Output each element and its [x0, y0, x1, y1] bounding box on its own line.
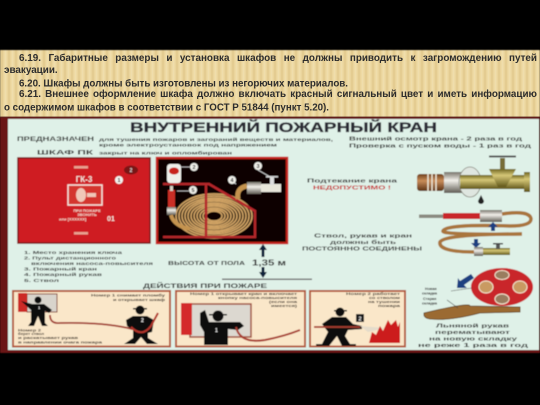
regulation text block [4, 53, 537, 114]
purpose text: ПРЕДНАЗНАЧЕН [17, 137, 94, 143]
purpose text [17, 136, 334, 156]
closed cabinet [18, 158, 150, 243]
parts list: включения насоса-повысителя [31, 262, 153, 267]
linen hose note: на новую складку [429, 336, 519, 342]
linen hose note: не реже 1 раза в год [418, 343, 529, 349]
action panel 1 [13, 291, 170, 346]
leak warning: Подтекание крана [307, 178, 399, 184]
hose reel illustration: складка [422, 292, 438, 296]
purpose text: закрыт на ключ и опломбирован [99, 150, 232, 156]
action panel 1: берет ствол [18, 332, 45, 336]
linen hose note: Льняной рукав [436, 322, 510, 330]
closed cabinet: ГК-3 [76, 175, 93, 184]
action panel 2: кнопку насоса-повысителя [218, 296, 297, 300]
connected parts note [302, 234, 422, 252]
purpose text: ШКАФ ПК [37, 150, 94, 156]
action panel 1: Номер 1 снимает пломбу [91, 294, 165, 298]
parchment band [0, 50, 540, 117]
purpose text: кроме электроустановок под напряжением [99, 144, 278, 148]
action panel 1: и раскатывает рукав [18, 336, 79, 340]
closed cabinet: 2 [130, 168, 133, 174]
height from floor: ВЫСОТА ОТ ПОЛА [168, 261, 246, 267]
action panel 1: 2 [141, 318, 144, 324]
poster frame [0, 117, 540, 353]
connected hose illustration [419, 210, 531, 256]
poster background [8, 119, 539, 350]
parts list: 5. Ствол [24, 278, 59, 284]
height from floor [168, 244, 312, 280]
regulation text block: 6.21. Внешнее оформление шкафа должно включать красный сигнальный цвет и иметь информацию [19, 89, 537, 100]
action panel 1: Номер 2 [18, 328, 41, 332]
action panel 1: 1 [38, 305, 41, 310]
open cabinet with hose: 4 [230, 178, 234, 184]
closed cabinet: или [ХХХХХХ] [59, 216, 87, 222]
action panel 3: Номер 2 работает [346, 292, 400, 296]
action panel 3: пожара [378, 304, 402, 308]
open cabinet with hose: 5 [191, 188, 195, 194]
hose reel illustration: Новая [425, 287, 437, 291]
closed cabinet: 01 [107, 216, 115, 223]
leak warning: НЕДОПУСТИМО ! [313, 186, 391, 192]
regulation text block: 6.19. Габаритные размеры и установка шкафов не должны приводить к загромождению путей [19, 53, 537, 64]
action panel 3: со стволом [369, 296, 401, 300]
fire valve illustration [417, 156, 530, 204]
closed cabinet: ПРИ ПОЖАРЕ [73, 208, 101, 213]
regulation text block: о содержимом шкафов в соответствии с ГОСТ Р 51844 (пункт 5.20). [4, 102, 329, 114]
action panel 2: 1 [215, 328, 218, 334]
hose reel illustration: Старая [423, 297, 436, 301]
poster [0, 117, 540, 353]
height from floor: 1,35 м [252, 258, 286, 268]
hose reel illustration: складка [422, 302, 438, 306]
parts list [24, 250, 153, 284]
hose reel illustration [422, 268, 533, 319]
action panel 3: 2 [358, 316, 362, 322]
parts list: 2. Пульт дистанционного [24, 256, 116, 262]
regulation text block: 6.20. Шкафы должны быть изготовлены из негорючих материалов. [19, 78, 348, 90]
linen hose note [418, 322, 529, 349]
purpose text: для тушения пожаров и загораний веществ и материалов, [99, 136, 334, 143]
action panel 2: имеется) [271, 304, 298, 308]
closed cabinet: ЗВОНИТЬ [77, 212, 97, 217]
regulation text block: эвакуации. [4, 65, 58, 76]
action panel 1: и открывает шкаф [113, 298, 165, 302]
open cabinet with hose: 3 [256, 164, 260, 170]
poster title: ВНУТРЕННИЙ ПОЖАРНЫЙ КРАН [130, 120, 437, 135]
parts list: 3. Пожарный кран [24, 266, 97, 272]
connected parts note: ПОСТОЯННО СОЕДИНЕНЫ [302, 246, 422, 252]
inspection text: Внешний осмотр крана - 2 раза в год [349, 136, 523, 142]
parts list: 1. Место хранения ключа [24, 250, 123, 256]
open cabinet with hose: 2 [192, 165, 196, 171]
action panel 2: (если она [269, 300, 299, 304]
connected parts note: должны быть [330, 239, 397, 246]
parts list: 4. Пожарный рукав [24, 271, 102, 278]
linen hose note: перематывают [435, 330, 511, 336]
inspection text [349, 136, 532, 150]
action panel 2: Номер 1 открывает кран и включает [190, 292, 297, 296]
closed cabinet: 1 [117, 178, 121, 184]
actions heading: ДЕЙСТВИЯ ПРИ ПОЖАРЕ [143, 281, 268, 290]
inspection text: Проверка с пуском воды - 1 раз в год [349, 144, 532, 150]
leak warning [307, 178, 399, 192]
connected parts note: Ствол, рукав и кран [314, 234, 412, 240]
action panel 2 [176, 291, 305, 346]
action panel 3 [310, 291, 405, 346]
action panel 3: на тушении [368, 300, 400, 304]
action panel 1: в направлении очага пожара [18, 340, 104, 344]
open cabinet with hose [157, 158, 287, 243]
